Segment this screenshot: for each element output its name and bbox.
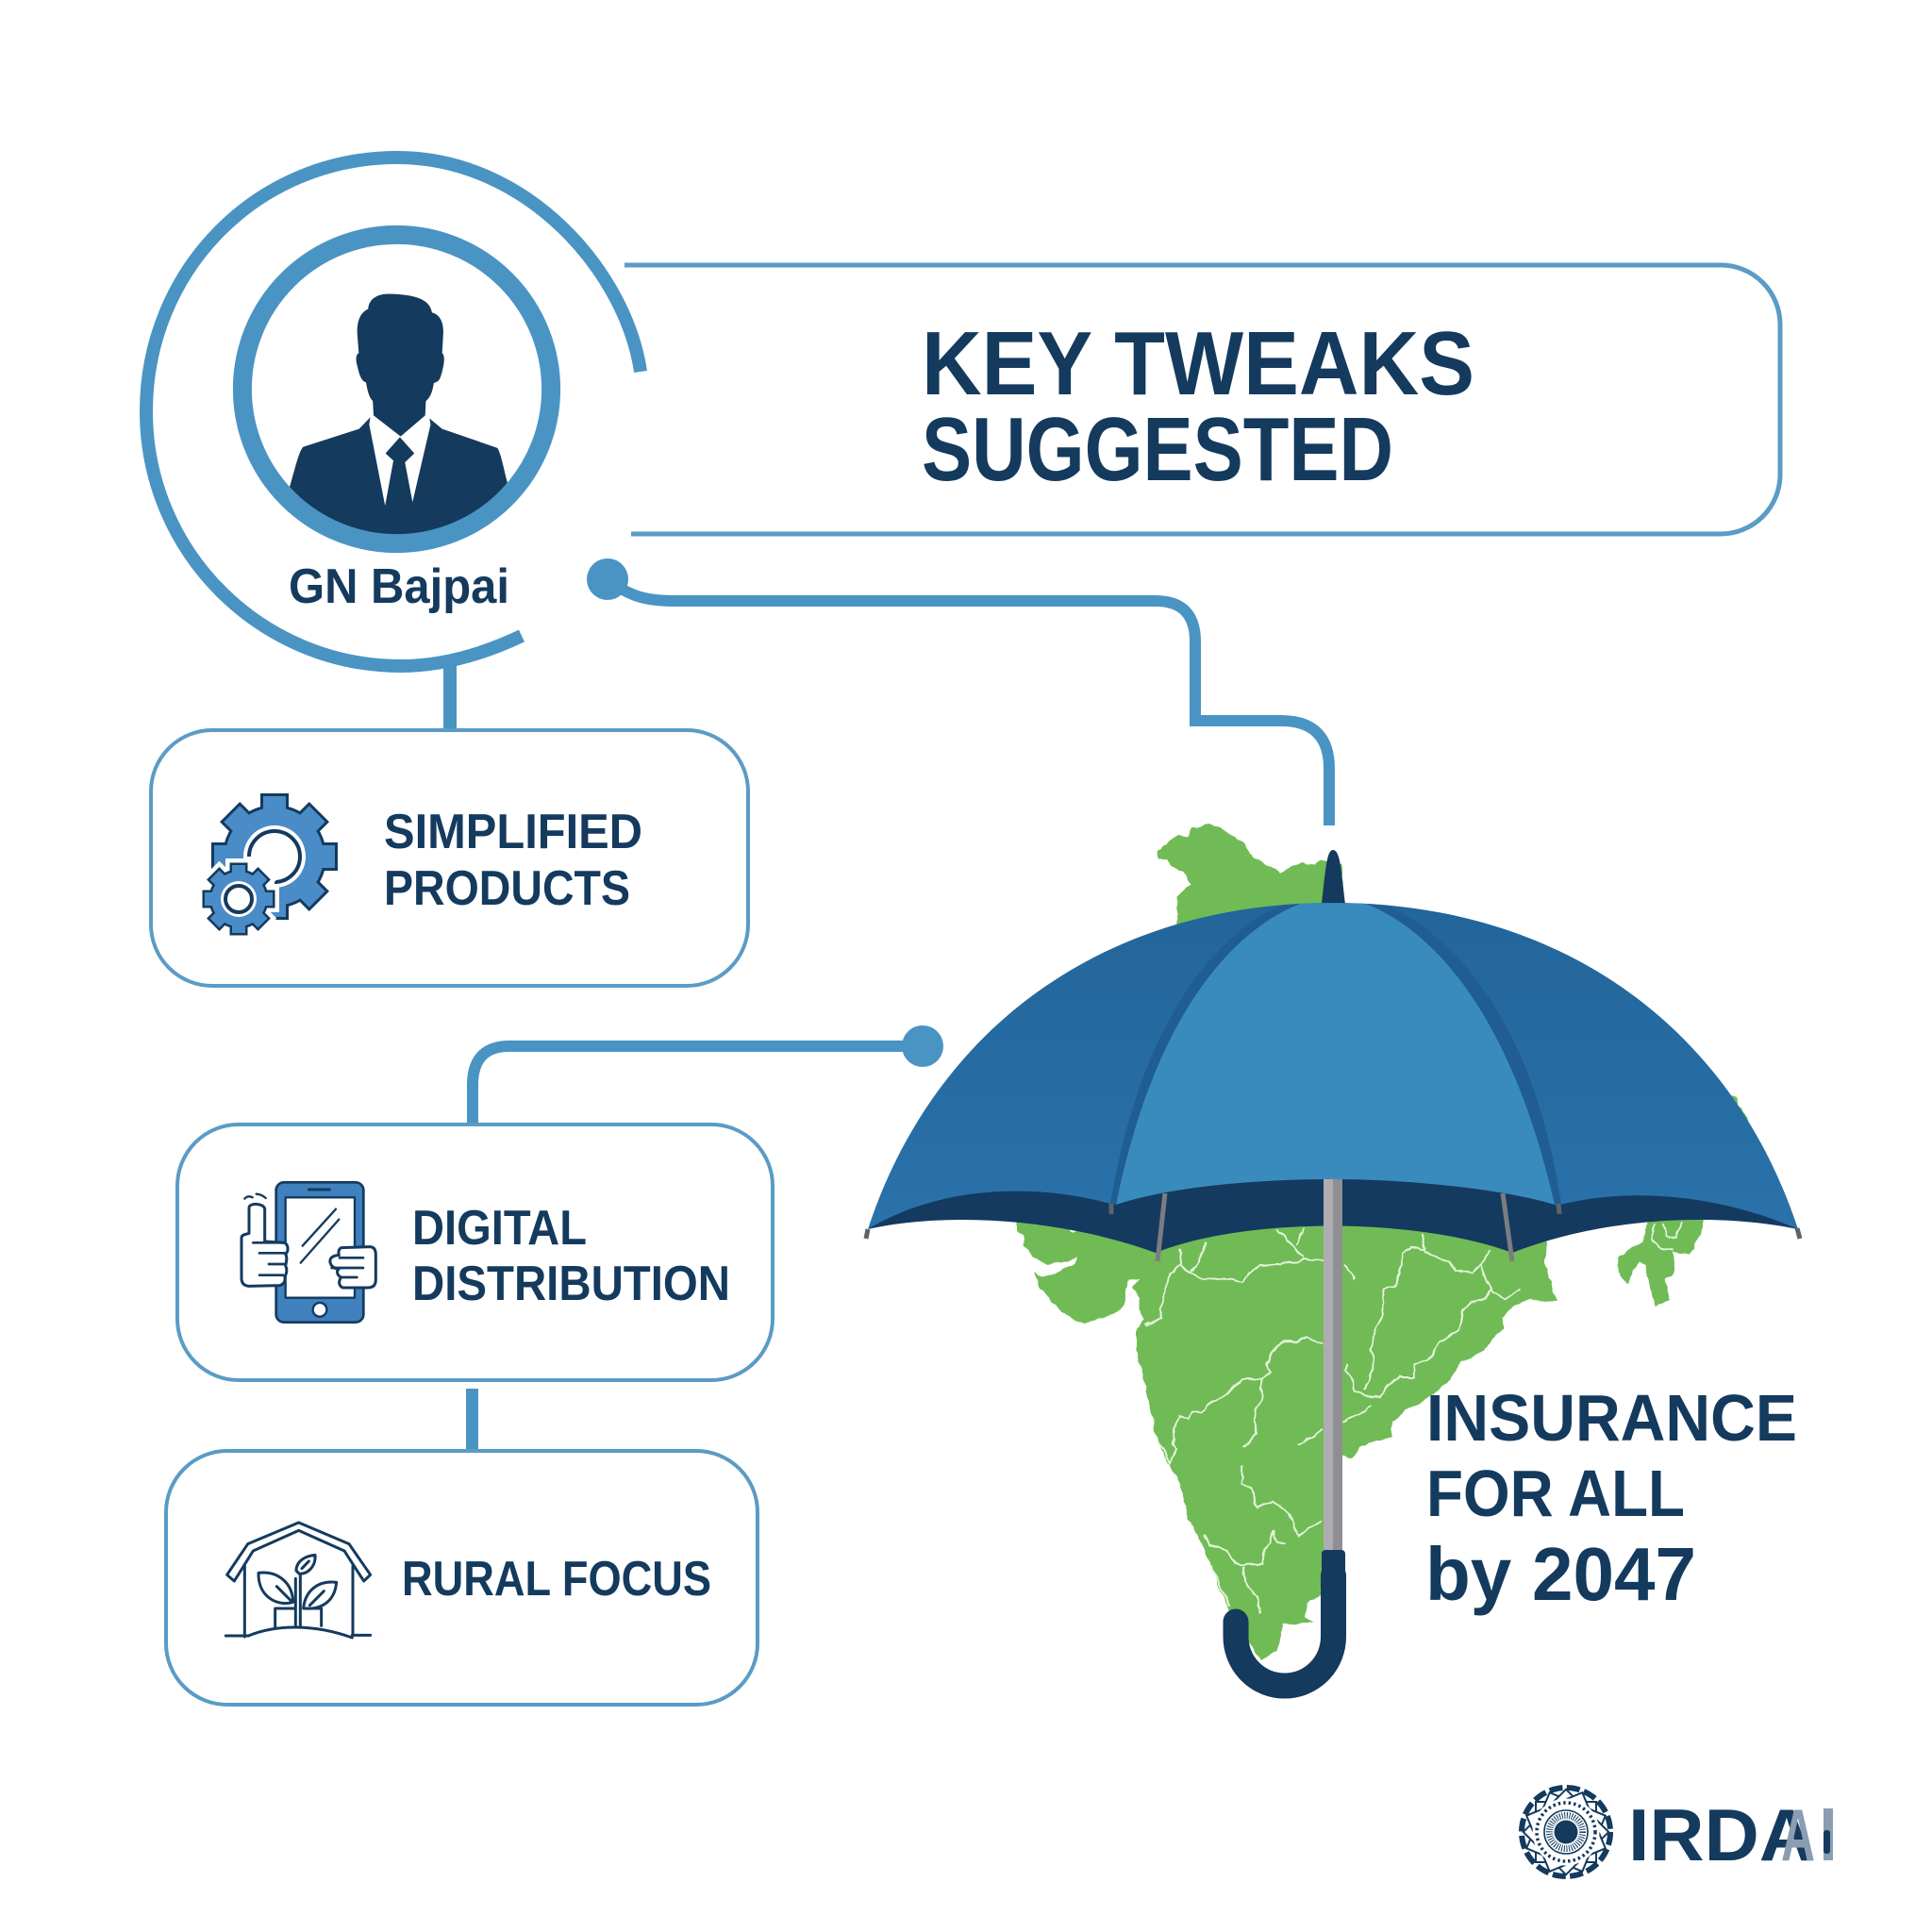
canopy (866, 903, 1800, 1261)
label: DISTRIBUTION (412, 1257, 730, 1311)
wordmark: IRDA (1628, 1793, 1814, 1876)
connector: umbrella to digital distribution (473, 1025, 943, 1124)
title text: SUGGESTED (922, 399, 1393, 500)
title panel (625, 265, 1780, 534)
title text: KEY TWEAKS (922, 313, 1474, 414)
label: RURAL FOCUS (402, 1552, 711, 1607)
outer panels (868, 903, 1798, 1229)
IRDAI logo (1522, 1788, 1833, 1876)
icon: farmhouse with plant (225, 1523, 371, 1638)
slogan text: by 2047 (1425, 1532, 1696, 1616)
ribs (1158, 1193, 1512, 1261)
connector: person to simplified products (443, 664, 457, 730)
state boundaries (1144, 1228, 1472, 1613)
portrait badge: GN Bajpai (146, 158, 641, 666)
label: DIGITAL (412, 1201, 587, 1256)
umbrella tip (1322, 850, 1345, 904)
icon: gears (205, 796, 335, 933)
canopy underside (868, 1174, 1798, 1253)
IRDAI logo: A (1781, 1793, 1815, 1876)
umbrella over India map (866, 824, 1800, 1686)
panel: rural focus (166, 1451, 758, 1705)
India map (1017, 824, 1748, 1660)
connector: person to umbrella (587, 558, 1329, 825)
slogan text: INSURANCE (1426, 1381, 1797, 1455)
seal (1522, 1788, 1610, 1876)
panel: simplified products (151, 730, 748, 986)
label: SIMPLIFIED (384, 805, 642, 859)
slogan text (1425, 1381, 1797, 1616)
inner ring (242, 235, 551, 543)
slogan text: FOR ALL (1426, 1457, 1685, 1530)
umbrella handle (1236, 1550, 1345, 1686)
label: PRODUCTS (384, 861, 630, 916)
panel: digital distribution (177, 1124, 773, 1380)
portrait silhouette (290, 294, 508, 534)
centre panel (1116, 903, 1555, 1205)
panel seams (1110, 904, 1561, 1205)
umbrella shaft (1324, 1174, 1342, 1552)
outer open ring (146, 158, 641, 666)
connector: digital distribution to rural focus (466, 1389, 478, 1451)
name label: GN Bajpai (289, 559, 509, 614)
icon: phone with hands (242, 1182, 375, 1323)
